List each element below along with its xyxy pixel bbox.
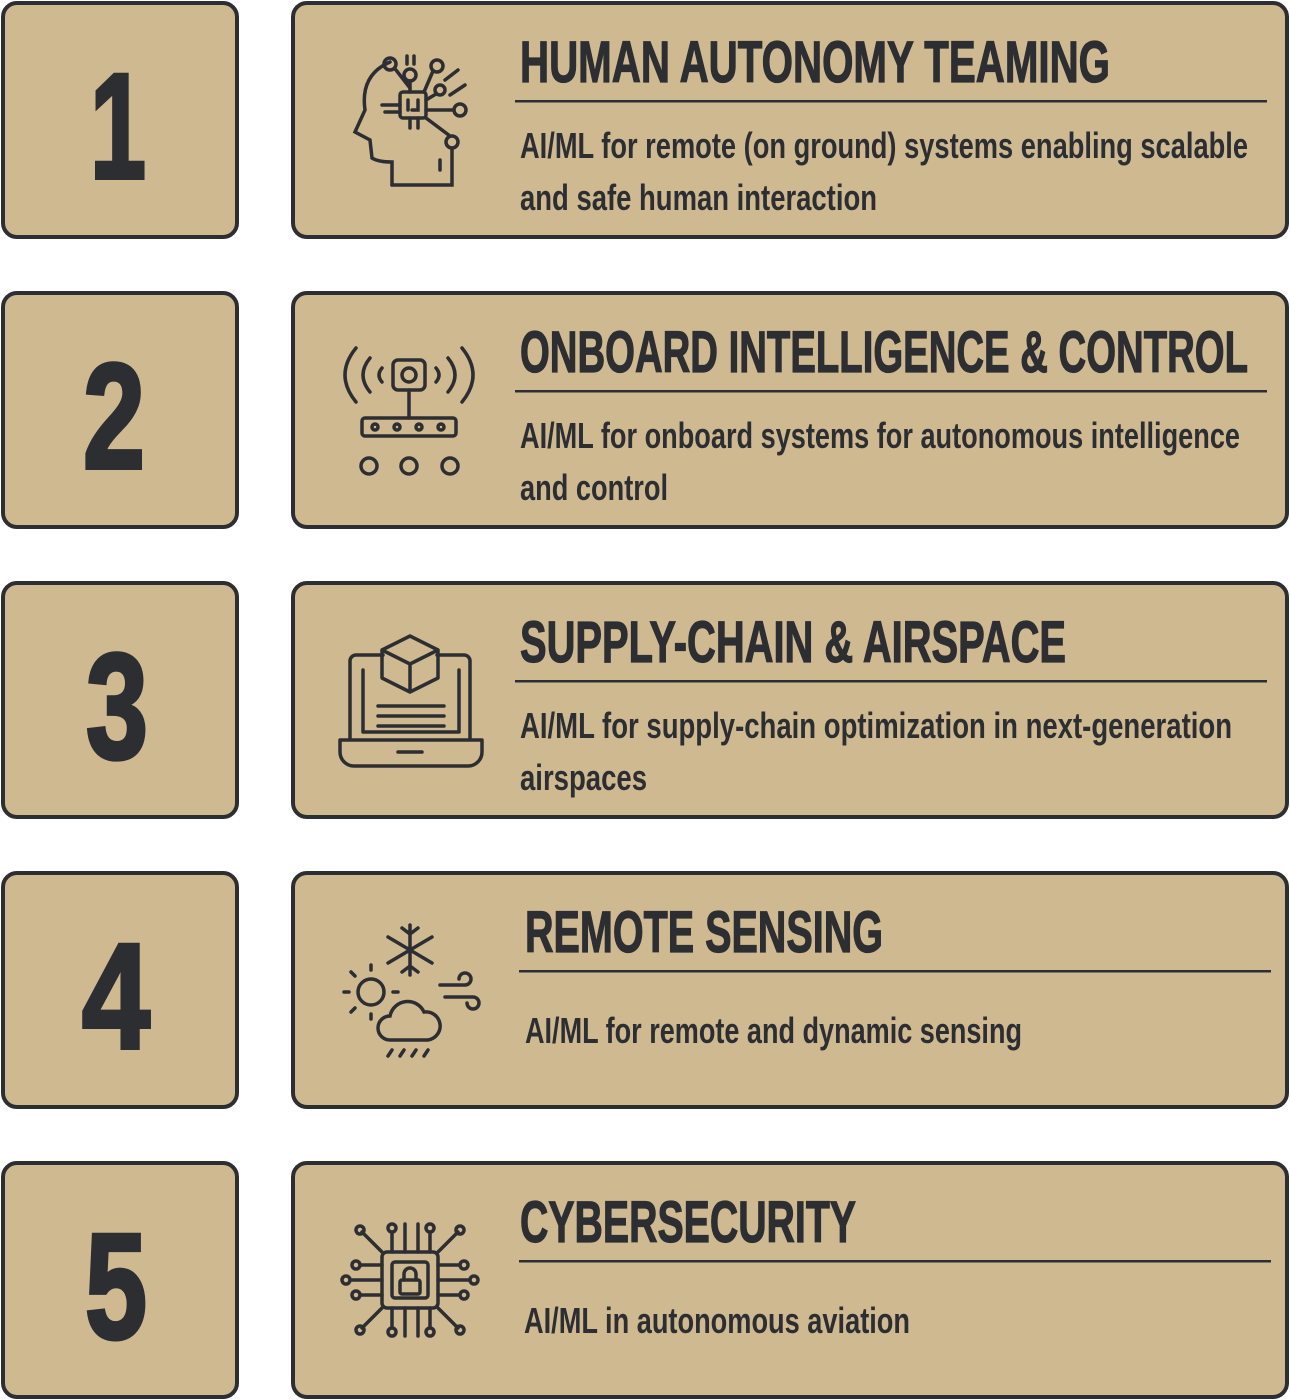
row 5 xyxy=(3,1163,1287,1397)
description: airspaces xyxy=(520,757,647,798)
description xyxy=(520,705,1232,798)
panel: human autonomy teaming xyxy=(293,3,1287,237)
number box 2 xyxy=(3,293,237,527)
number box 4 xyxy=(3,873,237,1107)
number box 1: 1 xyxy=(90,42,146,210)
number box 5: 5 xyxy=(85,1202,147,1370)
panel: supply chain xyxy=(293,583,1287,817)
number box 3: 3 xyxy=(86,622,148,790)
panel: remote sensing xyxy=(293,873,1287,1107)
icon: laptop with box xyxy=(340,636,482,766)
icon: signal device xyxy=(345,348,473,474)
description: AI/ML for remote and dynamic sensing xyxy=(525,1010,1022,1051)
number box 2: 2 xyxy=(83,332,145,500)
description: AI/ML in autonomous aviation xyxy=(524,1300,910,1341)
title: REMOTE SENSING xyxy=(525,900,883,965)
panel: cybersecurity xyxy=(293,1163,1287,1397)
number box 5 xyxy=(3,1163,237,1397)
number box 3 xyxy=(3,583,237,817)
icon: head with chip xyxy=(355,56,466,185)
description xyxy=(520,125,1248,218)
title: CYBERSECURITY xyxy=(520,1190,856,1255)
icon: chip with lock xyxy=(342,1224,478,1336)
row 1 xyxy=(3,3,1287,237)
row 2 xyxy=(3,293,1287,527)
icon: weather xyxy=(344,925,479,1056)
description: and safe human interaction xyxy=(520,177,877,218)
row 3 xyxy=(3,583,1287,817)
row 4 xyxy=(3,873,1287,1107)
panel: onboard intelligence xyxy=(293,293,1287,527)
number box 4: 4 xyxy=(82,912,150,1080)
description xyxy=(520,415,1240,508)
description: and control xyxy=(520,467,668,508)
number box 1 xyxy=(3,3,237,237)
